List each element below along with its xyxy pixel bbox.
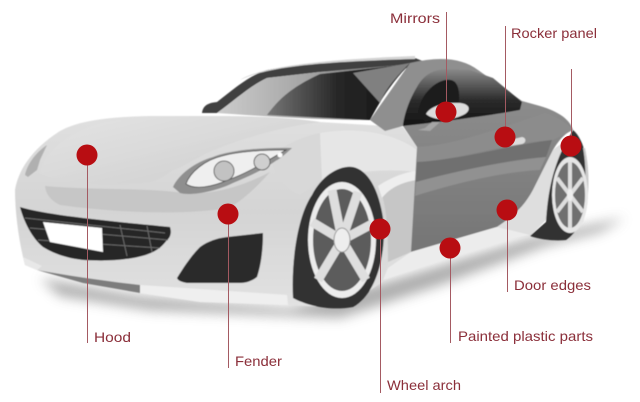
side window xyxy=(403,69,522,126)
marker: hood xyxy=(76,144,98,166)
car illustration xyxy=(15,56,589,308)
windshield xyxy=(217,64,410,120)
front wheel arch xyxy=(293,167,384,308)
marker: door edges xyxy=(496,200,518,220)
door handle xyxy=(510,137,525,146)
fog vent xyxy=(177,233,263,283)
hood panel xyxy=(40,116,320,184)
marker: wheel arch xyxy=(370,218,390,240)
door panel xyxy=(403,101,573,252)
sill and rear fender xyxy=(383,140,572,280)
label: Mirrors: Mirrors xyxy=(390,10,440,26)
marker: fender xyxy=(218,204,238,224)
label: Hood: Hood xyxy=(94,329,131,345)
label: Wheel arch: Wheel arch xyxy=(387,377,461,393)
label: Fender: Fender xyxy=(235,353,282,369)
headlight xyxy=(173,148,292,194)
a-pillar and roof xyxy=(370,59,522,131)
marker: painted plastic parts xyxy=(440,238,460,258)
ground shadow xyxy=(40,218,625,318)
left headlight xyxy=(25,145,47,177)
leader lines xyxy=(88,12,572,393)
bumper shade xyxy=(45,172,270,212)
label: Painted plastic parts: Painted plastic parts xyxy=(458,328,593,344)
fender highlights xyxy=(314,131,417,180)
label: Rocker panel: Rocker panel xyxy=(511,25,597,41)
marker: rocker panel xyxy=(494,126,516,148)
windshield frame xyxy=(202,58,425,113)
mirror xyxy=(426,103,469,119)
license plate xyxy=(43,222,103,252)
rear tyre xyxy=(530,130,588,240)
front lower splitter xyxy=(37,270,140,293)
car body xyxy=(15,116,417,308)
front wheel xyxy=(308,182,376,298)
rear wheel xyxy=(552,157,588,233)
marker: mirrors xyxy=(436,102,456,122)
label: Door edges: Door edges xyxy=(514,277,591,293)
marker: rear arch xyxy=(560,136,582,156)
front grille xyxy=(20,207,171,261)
